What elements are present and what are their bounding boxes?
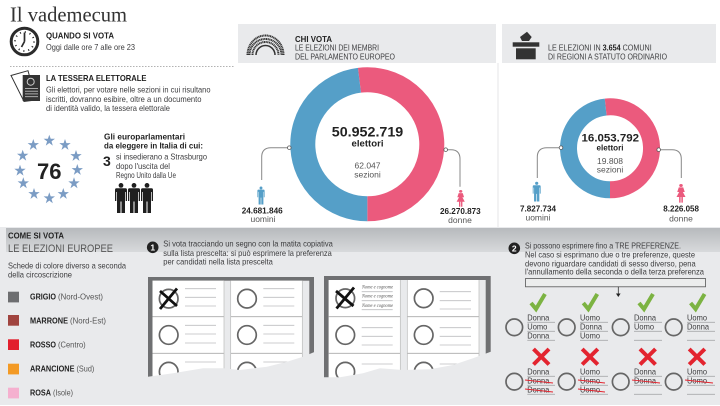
chart: scheda 2: Nome e cognome — [361, 304, 394, 309]
text: tessera: Gli elettori, per votare nelle sezioni in cui risultano — [46, 84, 211, 94]
panel: istruzione 1 — [146, 239, 492, 390]
heading: quando si vota: QUANDO SI VOTA — [46, 30, 114, 40]
icon: cerchio di stelle — [14, 135, 83, 203]
options: combinazioni non valide: Uomo — [580, 366, 600, 376]
panel: la tessera elettorale — [11, 71, 211, 113]
number: totale elettori: 50.952.719 — [332, 124, 403, 140]
number: 3: 3 — [103, 153, 111, 169]
options: combinazioni non valide: Uomo — [687, 375, 707, 385]
chart: donut elettori — [303, 80, 432, 209]
text: strasburgo: Regno Unito dalla Ue — [116, 170, 176, 180]
icon: tessera — [11, 71, 40, 102]
icon: uomo comuni — [533, 182, 541, 202]
options: combinazioni valide: Donna — [527, 330, 550, 340]
chart: scheda 2 — [322, 276, 492, 390]
callout: uomini: 24.681.846 — [242, 206, 283, 216]
icon: numero 1: 1 — [150, 242, 155, 252]
number: totale comuni: 19.808 — [597, 156, 623, 166]
icon: donna — [457, 190, 465, 207]
text: strasburgo: dopo l'uscita del — [116, 161, 170, 171]
options: combinazioni non valide: Donna — [634, 366, 656, 376]
text: istruzione 1 — [163, 239, 333, 267]
callout: donne — [440, 148, 481, 225]
number: totale elettori: 62.047 — [354, 160, 381, 170]
heading: europarlamentari: Gli europarlamentari — [104, 132, 185, 142]
text: strasburgo: si insedierano a Strasburgo — [116, 152, 207, 162]
chart: scheda 2: Nome e cognome — [361, 286, 394, 290]
text: schede: della circoscrizione — [8, 270, 72, 280]
panel: quando si vota — [11, 28, 135, 55]
options: combinazioni valide: Uomo — [634, 322, 654, 332]
icon: numero 2 — [508, 242, 520, 254]
options: combinazioni valide: Donna — [527, 313, 550, 323]
options: combinazioni non valide: Uomo — [580, 375, 600, 385]
icon: numero 2: 2 — [512, 243, 517, 253]
callout: uomini — [242, 146, 291, 224]
options: combinazioni non valide: Uomo — [687, 366, 707, 376]
chart: donut comuni — [569, 107, 652, 190]
options: combinazioni non valide: Uomo — [580, 384, 600, 394]
panel: 76 europarlamentari — [14, 132, 207, 213]
heading: la tessera elettorale: LA TESSERA ELETTORALE — [46, 73, 147, 83]
options: combinazioni valide: Donna — [580, 322, 602, 332]
options: combinazioni valide: Donna — [687, 322, 709, 332]
diagram: bracket and arrow — [526, 278, 706, 297]
legend: colori schede — [8, 292, 106, 398]
number: totale comuni — [582, 133, 639, 175]
number: totale elettori — [332, 124, 403, 179]
icon: uomo — [257, 186, 265, 204]
text: orario: Oggi dalle ore 7 alle ore 23 — [46, 42, 135, 52]
heading: come si vota — [8, 230, 113, 255]
callout: donne: donne — [448, 215, 472, 225]
chart: scheda 1 — [146, 277, 315, 390]
legend: colori schede: (Isole) — [53, 388, 73, 398]
chart: scheda 2: Nome e cognome — [361, 295, 394, 300]
text: tessera: di identità valido, la tessera elettorale — [46, 103, 170, 113]
icon: urna — [513, 32, 539, 59]
text: istruzione 1: Si vota tracciando un segno con la matita copiativa — [163, 239, 333, 249]
icons: spunte verdi — [531, 294, 705, 309]
legend: colori schede: (Sud) — [76, 364, 94, 374]
text: istruzione 2: Si possono esprimere fino a TRE PREFERENZE. — [525, 240, 681, 250]
legend: colori schede: ROSSO — [30, 340, 56, 350]
options: combinazioni non valide — [506, 366, 715, 394]
options: combinazioni non valide: Donna — [527, 384, 550, 394]
header: comuni — [502, 24, 716, 63]
number: totale comuni: 16.053.792 — [582, 133, 639, 145]
number: totale comuni: elettori — [596, 143, 624, 152]
legend: colori schede: (Nord-Est) — [70, 316, 106, 326]
text: istruzione 2 — [525, 240, 704, 276]
text: istruzione 2: Nel caso si esprimano due o tre preferenze, queste — [525, 249, 695, 259]
panel: istruzione 2 — [506, 240, 715, 394]
icon: croce di voto — [160, 288, 177, 309]
panel: chi vota — [238, 24, 496, 225]
options: combinazioni valide: Uomo — [687, 313, 707, 323]
options: combinazioni valide: Uomo — [580, 313, 600, 323]
icon: parlamento — [248, 36, 284, 55]
text: tessera: iscritti, dovranno esibire, oltre a un documento — [46, 94, 202, 104]
options: combinazioni valide: Donna — [634, 313, 656, 323]
options: combinazioni valide: Uomo — [580, 330, 600, 340]
number: totale comuni: sezioni — [597, 165, 623, 175]
callout: donne comuni: donne — [669, 214, 693, 224]
icon: tre persone — [115, 183, 153, 213]
header: chi vota — [238, 24, 496, 63]
legend: colori schede: (Centro) — [58, 340, 86, 350]
icon: numero 1 — [147, 242, 158, 253]
icon: donna comuni — [676, 184, 686, 203]
heading: europarlamentari — [104, 132, 203, 150]
callout: donne comuni — [657, 148, 699, 224]
icon: croce di voto 2 — [336, 288, 354, 308]
options: combinazioni valide — [506, 313, 715, 340]
number: totale elettori: sezioni — [354, 169, 381, 179]
text: istruzione 1: sulla lista prescelta: si può esprimere la preferenza — [163, 248, 332, 258]
panel: come si vota — [0, 227, 720, 405]
heading: come si vota: COME SI VOTA — [8, 230, 64, 240]
callout: donne comuni: 8.226.058 — [663, 204, 699, 214]
legend: colori schede: ROSA — [30, 388, 51, 398]
heading: chi vota: CHI VOTA — [295, 34, 332, 44]
legend: colori schede: GRIGIO — [30, 292, 56, 302]
number: 76: 76 — [37, 159, 62, 184]
callout: uomini comuni: 7.827.734 — [520, 204, 556, 214]
text: schede: Schede di colore diverso a seconda — [8, 260, 126, 270]
text: istruzione 1: per candidati nella lista prescelta — [163, 257, 273, 267]
callout: uomini comuni: uomini — [525, 213, 551, 223]
callout: uomini: uomini — [250, 214, 276, 224]
heading: europarlamentari: da eleggere in Italia di cui: — [104, 140, 203, 150]
options: combinazioni valide: Uomo — [527, 322, 548, 332]
icons: croci rosse — [534, 349, 705, 364]
title: Il vademecum — [10, 2, 127, 26]
panel: comuni — [502, 24, 716, 224]
options: combinazioni non valide: Donna — [527, 375, 550, 385]
number: totale elettori: elettori — [352, 139, 384, 149]
text: membri: LE ELEZIONI DEI MEMBRI — [295, 42, 379, 52]
legend: colori schede: (Nord-Ovest) — [58, 292, 103, 302]
text: membri: DEL PARLAMENTO EUROPEO — [295, 52, 395, 62]
options: combinazioni non valide: Donna — [527, 366, 550, 376]
text: comuni — [548, 42, 667, 62]
legend: colori schede: MARRONE — [30, 316, 68, 326]
text: comuni: DI REGIONI A STATUTO ORDINARIO — [548, 52, 667, 62]
text: membri — [295, 42, 395, 62]
callout: uomini comuni — [520, 146, 563, 223]
heading: come si vota: LE ELEZIONI EUROPEE — [8, 243, 113, 255]
text: tessera — [46, 84, 211, 113]
options: combinazioni non valide: Donna — [634, 375, 656, 385]
text: comuni: LE ELEZIONI IN 3.654 COMUNI — [548, 42, 652, 52]
legend: colori schede: ARANCIONE — [30, 364, 75, 374]
text: schede — [8, 260, 126, 280]
callout: donne: 26.270.873 — [440, 206, 481, 216]
icon: clock — [11, 28, 38, 55]
text: strasburgo — [116, 152, 207, 180]
text: istruzione 2: devono riguardare candidati di sesso diverso, pena — [525, 258, 696, 268]
